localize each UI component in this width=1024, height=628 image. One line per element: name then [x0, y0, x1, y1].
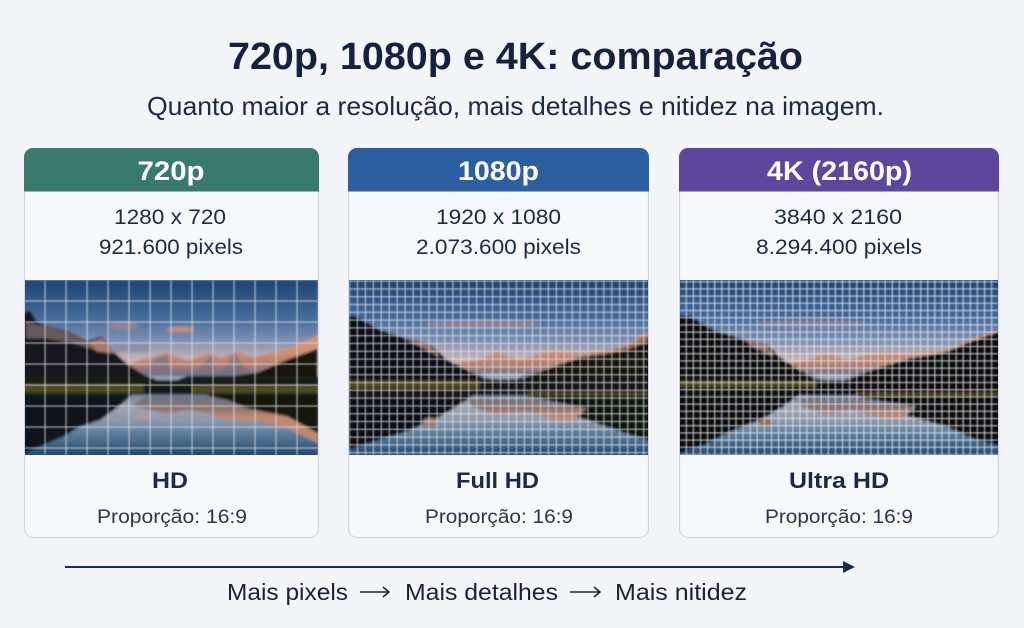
resolution text [416, 205, 581, 259]
header: 1080p [348, 148, 649, 192]
image: mountain lake with coarse grid [20, 277, 323, 460]
aspect ratio: Proporção: 16:9 [425, 507, 573, 528]
arrow: to details [360, 587, 389, 597]
card body [24, 148, 318, 538]
panel: 1080p [343, 148, 654, 538]
card body [348, 148, 648, 538]
label: HD: HD [152, 468, 188, 493]
label: Full HD: Full HD [456, 468, 539, 493]
resolution text: 3840 x 2160 [774, 205, 902, 229]
arrow: to sharpness [570, 587, 600, 597]
header: 4K (2160p) [679, 148, 999, 192]
panel: 4K [674, 148, 1003, 538]
resolution text: 921.600 pixels [99, 235, 243, 259]
resolution text [756, 205, 922, 259]
resolution text: 2.073.600 pixels [416, 235, 581, 259]
caption: more pixels, more details, more sharpness [227, 579, 747, 605]
title: 720p, 1080p e 4K: comparação [228, 36, 803, 78]
arrow: progression line [65, 561, 855, 573]
resolution text [99, 205, 243, 259]
aspect ratio: Proporção: 16:9 [765, 507, 913, 528]
caption: more pixels, more details, more sharpness: Mais pixels [227, 579, 348, 605]
caption: more pixels, more details, more sharpness: Mais nitidez [615, 579, 747, 605]
panel: 720p [20, 148, 323, 538]
image: mountain lake with fine grid [343, 277, 654, 460]
image: mountain lake with very fine grid [674, 277, 1003, 460]
aspect ratio: Proporção: 16:9 [97, 507, 247, 528]
resolution text: 8.294.400 pixels [756, 235, 922, 259]
label: Ultra HD: Ultra HD [789, 468, 889, 493]
subtitle: Quanto maior a resolução, mais detalhes e nitidez na imagem. [147, 91, 884, 121]
resolution text: 1920 x 1080 [436, 205, 561, 229]
header: 4K (2160p): 4K (2160p) [767, 156, 912, 186]
header: 720p: 720p [138, 156, 204, 186]
header: 720p [24, 148, 319, 192]
header: 1080p: 1080p [458, 156, 539, 186]
resolution text: 1280 x 720 [114, 205, 226, 229]
caption: more pixels, more details, more sharpness: Mais detalhes [405, 579, 558, 605]
card body [680, 148, 998, 538]
